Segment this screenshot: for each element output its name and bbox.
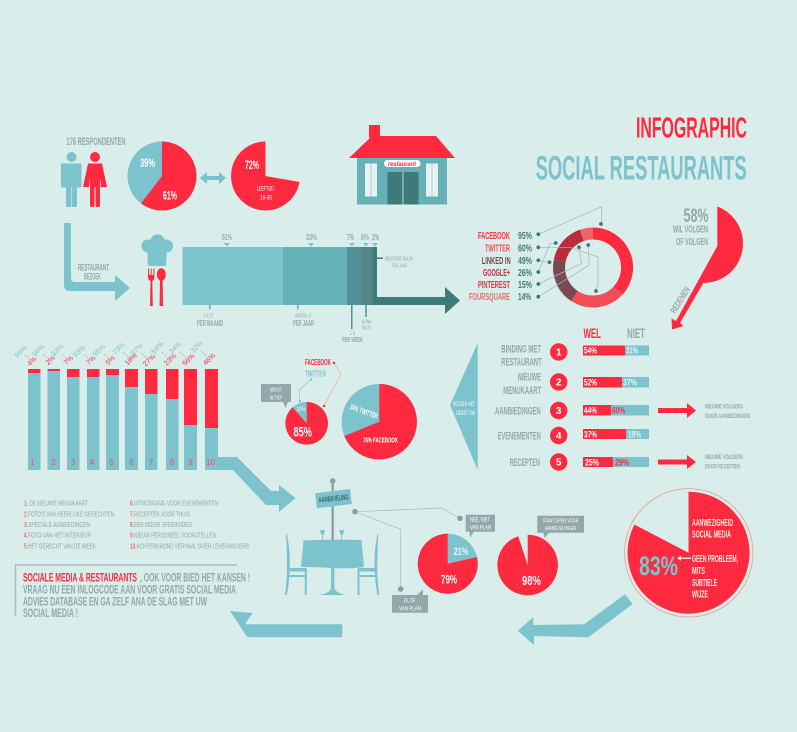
reasons labels: RESTAURANT <box>501 357 542 369</box>
callout: open to recommendations: AANBEVELINGEN <box>545 526 576 532</box>
rotated bar percentages: 96% <box>14 345 29 360</box>
title <box>536 112 747 187</box>
icon: chef hat <box>142 234 173 266</box>
frequency percentages: 2% <box>372 233 379 242</box>
wel/niet bars: 54% <box>584 346 597 356</box>
reasons labels: NIEUWE <box>518 372 541 384</box>
recommendation sign: AANBEVELING <box>318 492 349 504</box>
numbered circles: 5 <box>556 458 562 469</box>
rotated bar percentages: 93% <box>72 344 87 359</box>
social network legend: PINTEREST <box>478 279 510 291</box>
facebook twitter labels <box>299 358 341 407</box>
arrow: from bars to table <box>218 457 296 512</box>
pie chart: 85% active: 85% <box>294 424 312 440</box>
reasons labels: RECEPTEN <box>510 457 540 469</box>
pie chart: facebook vs twitter: 34% TWITTER <box>349 402 379 421</box>
rotated bar percentages: 23% <box>163 353 178 367</box>
frequency labels: MEERDERE MALEN <box>385 256 413 262</box>
icon: man <box>61 152 82 207</box>
frequency percentages: 51% <box>222 233 232 242</box>
callout: most active <box>261 384 291 408</box>
numbered list: content types left: 4.FOTO VAN HET INTERIEUR <box>24 530 91 540</box>
triangle: most like to follow for: VOLGEN HET <box>453 402 475 408</box>
rotated bar percentages: 32% <box>190 340 205 355</box>
callout: yes, or planning: JA, OF <box>404 598 416 604</box>
call to action text <box>16 565 250 620</box>
callout: most active: ACTIEF <box>270 396 282 402</box>
rotated bar percentages: 54% <box>150 341 165 356</box>
rotated bar percentages: 93% <box>51 343 65 358</box>
frequency labels: PER WEEK <box>342 337 363 344</box>
rotated bar percentages: 2% <box>45 355 57 367</box>
wel/niet bars: 29% <box>615 458 629 468</box>
arrow: towards call to action <box>230 611 342 637</box>
numbered circles: 4 <box>556 431 562 442</box>
frequency percentages: 7% <box>347 233 354 242</box>
social network legend <box>469 230 532 303</box>
social network legend: TWITTER <box>485 242 510 254</box>
numbered circles <box>550 343 567 471</box>
triangle: most like to follow for <box>450 343 478 470</box>
numbered circles: 2 <box>556 378 562 389</box>
numbered list: content types left: 2.FOTO'S VAN HEERLIJKE GERECHTEN <box>24 510 114 518</box>
numbered list: content types right: 9.NIEUW PERSONEEL VOORSTELLEN <box>130 530 216 540</box>
pie chart: gender 61% / 39%: 39% <box>140 158 155 170</box>
callout: no, not planning <box>466 515 495 538</box>
rotated bar percentages: 98% <box>32 343 46 358</box>
wel/niet bars: 44% <box>584 406 597 416</box>
icon: restaurant house <box>349 125 455 204</box>
pie chart: 83% social media presence: AANWEZIGHEID <box>692 518 733 529</box>
bar chart: content types: 2 <box>51 458 56 467</box>
arrow: restaurant visit <box>64 223 130 301</box>
bar chart: content types: 4 <box>90 458 95 467</box>
numbered list: content types right: 10.ACHTERGROND VERHAAL OVER LEVERANCIERS <box>130 542 249 550</box>
rotated bar percentages: 95% <box>92 343 107 358</box>
rotated bar percentages: 7% <box>85 355 97 367</box>
icon: woman <box>83 152 107 207</box>
pie chart: 98%: 98% <box>522 573 541 588</box>
wel/niet bars: 31% <box>626 346 638 356</box>
frequency labels: NOOIT <box>362 326 371 332</box>
call to action text: VRAAG NU EEN INLOGCODE AAN VOOR GRATIS SOCIAL MEDIA <box>23 584 236 596</box>
social network legend: FACEBOOK <box>478 230 510 242</box>
facebook twitter labels: TWITTER <box>305 370 326 378</box>
frequency labels: 1 A 2 X <box>204 314 213 320</box>
bar chart: content types: 3 <box>71 458 76 467</box>
wel/niet bars: 25% <box>585 458 599 468</box>
social network legend: FOURSQUARE <box>469 291 510 303</box>
rotated bar percentages: 46% <box>202 352 217 367</box>
numbered list: content types right <box>130 498 249 550</box>
wel/niet bars: 60% <box>612 406 625 416</box>
pie chart: 98% <box>497 535 558 595</box>
social network legend: LINKED IN <box>482 255 511 267</box>
pie chart: age 72%: 18-35 <box>260 194 272 202</box>
call to action text: SOCIAL MEDIA ! <box>23 608 78 620</box>
reasons labels: AANBIEDINGEN <box>495 405 541 417</box>
numbered list: content types left <box>24 498 114 550</box>
rotated bar percentages: 4% <box>26 356 38 368</box>
numbered circles: 1 <box>556 348 562 359</box>
arrow: from large pie to left <box>518 594 633 645</box>
new followers through offers text: NIEUWE VOLGERS <box>705 404 743 410</box>
bar chart: content types: 8 <box>170 458 175 467</box>
wel/niet bars: 52% <box>584 378 597 388</box>
reasons labels: BINDING MET <box>501 343 541 355</box>
column headers: wel / niet <box>584 325 645 341</box>
pie chart: 85% active: 10% <box>296 407 306 413</box>
pie chart: gender 61% / 39% <box>128 142 196 210</box>
pie arrow: 58% want to follow <box>668 206 743 330</box>
new followers through recipes text <box>705 454 743 470</box>
frequency labels: 1 X <box>350 331 355 337</box>
pie chart: 83% social media presence: WIJZE <box>692 590 708 600</box>
numbered list: content types left: 5.HET GERECHT VAN DE WEEK <box>24 542 96 550</box>
pie chart: 79% / 21%: 21% <box>454 546 468 558</box>
pie chart: 83% social media presence: SOCIAL MEDIA <box>692 530 731 540</box>
rotated bar percentages: 18% <box>124 352 139 367</box>
icon: restaurant house: restaurant <box>388 161 417 168</box>
donut leader lines <box>536 207 603 299</box>
rotated bar percentages: 56% <box>182 353 196 367</box>
new followers through recipes text: NIEUWE VOLGERS <box>705 454 743 461</box>
icon: fork and spoon <box>148 268 166 306</box>
reasons labels <box>495 343 542 469</box>
social network legend: 49% <box>518 255 532 267</box>
arrow: new followers through offers <box>658 403 696 418</box>
bar chart: content types: 6 <box>129 458 134 467</box>
new followers through offers text <box>705 404 750 420</box>
frequency labels: PER MAAND <box>197 319 223 328</box>
arrow: new followers through recipes <box>658 455 696 469</box>
callout: open to recommendations: STAAT OPEN VOOR <box>542 518 579 524</box>
pie chart: facebook vs twitter: 76% FACEBOOK <box>363 438 398 444</box>
bar chart: content types: 10 <box>206 458 215 467</box>
numbered list: content types left: 3.SPECIALE AANBIEDINGEN <box>24 520 90 529</box>
arrow: frequency bar <box>377 287 460 314</box>
facebook twitter labels: FACEBOOK <box>305 358 331 367</box>
triangle: most like to follow for: LIEBST VIA <box>456 411 475 417</box>
reasons labels: EVENEMENTEN <box>498 430 541 442</box>
social network legend: 60% <box>518 242 532 254</box>
numbered list: content types left: 1. DE NIEUWE MENUKAART <box>24 498 88 508</box>
callout: no, not planning: NEE, NIET <box>470 518 490 524</box>
numbered list: content types right: 7.RECEPTEN VOOR THUIS <box>130 510 190 518</box>
pie chart: 83% social media presence: 83% <box>639 551 678 581</box>
callout: yes, or planning: VAN PLAN <box>399 606 421 612</box>
reasons labels: MENUKAART <box>503 385 541 397</box>
recommendation sign <box>315 478 352 541</box>
bar chart: content types: 7 <box>149 458 154 467</box>
column headers: wel / niet: NIET <box>627 325 645 341</box>
call to action text: ADVIES DATABASE EN GA ZELF ANA DE SLAG MET UW <box>23 596 207 608</box>
pie chart: age 72%: 72% <box>245 160 259 172</box>
frequency percentages <box>222 233 379 246</box>
rotated bar percentages: 67% <box>130 342 145 357</box>
icon: double arrow <box>200 172 226 184</box>
frequency labels: PER JAAR <box>293 319 314 328</box>
frequency labels <box>197 256 413 344</box>
pie chart: 85% active <box>285 402 328 445</box>
bar chart: content types: 9 <box>188 458 193 467</box>
pie arrow: 58% want to follow: WIL VOLGEN <box>673 224 708 236</box>
pie arrow: 58% want to follow: 58% <box>684 206 709 227</box>
pie chart: 83% social media presence: GEEN PROBLEEM, <box>692 554 738 565</box>
call to action text: SOCIALE MEDIA & RESTAURANTS <box>23 572 137 584</box>
frequency labels: PER JAAR <box>392 264 407 270</box>
restaurant visit label: BEZOEK <box>84 272 101 282</box>
pie chart: gender 61% / 39%: 61% <box>163 190 177 202</box>
recommendation leader lines <box>352 508 463 592</box>
pie chart: age 72% <box>231 142 300 210</box>
pie arrow: 58% want to follow: OF VOLGEN <box>676 237 708 248</box>
wel/niet bars <box>583 346 649 468</box>
new followers through recipes text: DOOR RECEPTEN <box>705 464 740 470</box>
social network legend: 15% <box>518 279 532 291</box>
rotated bar percentages: 73% <box>112 342 127 357</box>
frequency labels: BIJNA <box>362 320 371 326</box>
social network legend: 14% <box>518 291 531 303</box>
new followers through offers text: DOOR AANBIEDINGEN <box>705 413 750 420</box>
social network legend: 26% <box>518 267 532 279</box>
bar chart: content types: 5 <box>109 458 114 467</box>
wel/niet bars: 37% <box>584 430 597 440</box>
frequency labels: AANTAL X <box>295 314 311 320</box>
restaurant visit label <box>78 262 109 282</box>
call to action text: , OOK VOOR BIED HET KANSEN ! <box>140 572 250 584</box>
donut chart: social networks <box>559 233 627 302</box>
numbered list: content types right: 6.UITNODIGING VOOR EVENEMENTEN <box>130 498 218 508</box>
frequency percentages: 33% <box>306 233 317 242</box>
bar chart: content types: 1 <box>30 458 35 467</box>
text: RESTAURANT <box>78 262 109 274</box>
numbered circles: 3 <box>556 406 562 417</box>
respondents heading: 176 RESPONDENTEN <box>66 136 126 148</box>
rotated bar percentages: 34% <box>168 341 183 356</box>
stacked bar: visit frequency <box>182 247 377 305</box>
callout: most active: MEEST <box>270 388 282 394</box>
social network legend: 95% <box>518 230 532 242</box>
frequency percentages: 6% <box>361 233 369 242</box>
pie chart: 83% social media presence: SUBTIELE <box>692 578 717 589</box>
pie chart: facebook vs twitter <box>342 384 417 459</box>
wel/niet bars: 19% <box>628 430 641 440</box>
rotated bar percentages: 7% <box>63 355 75 367</box>
bar chart: content types <box>28 369 218 470</box>
pie chart: 79% / 21%: 79% <box>441 574 457 586</box>
pie chart: 83% social media presence: MITS <box>692 566 705 577</box>
rotated bar percentages: 27% <box>142 353 157 368</box>
wel/niet bars: 37% <box>623 378 637 388</box>
pie chart: age 72%: LEEFTIJD <box>257 186 274 192</box>
icon: table and chairs <box>285 530 379 595</box>
callout: no, not planning: VAN PLAN <box>470 526 491 532</box>
column headers: wel / niet: WEL <box>584 325 601 341</box>
rotated bar percentages: 5% <box>105 355 117 367</box>
pie chart: 83% social media presence <box>625 489 753 617</box>
pie chart: 79% / 21% <box>418 534 478 594</box>
numbered list: content types right: 8.EEN MOOIE SFEERVIDEO <box>130 520 192 529</box>
callout: yes, or planning <box>392 589 428 613</box>
pie arrow: 58% want to follow: REDENEN <box>668 285 692 315</box>
callout: open to recommendations <box>537 516 584 538</box>
social network legend: GOOGLE+ <box>483 267 510 279</box>
rotated bar percentages <box>14 340 217 368</box>
